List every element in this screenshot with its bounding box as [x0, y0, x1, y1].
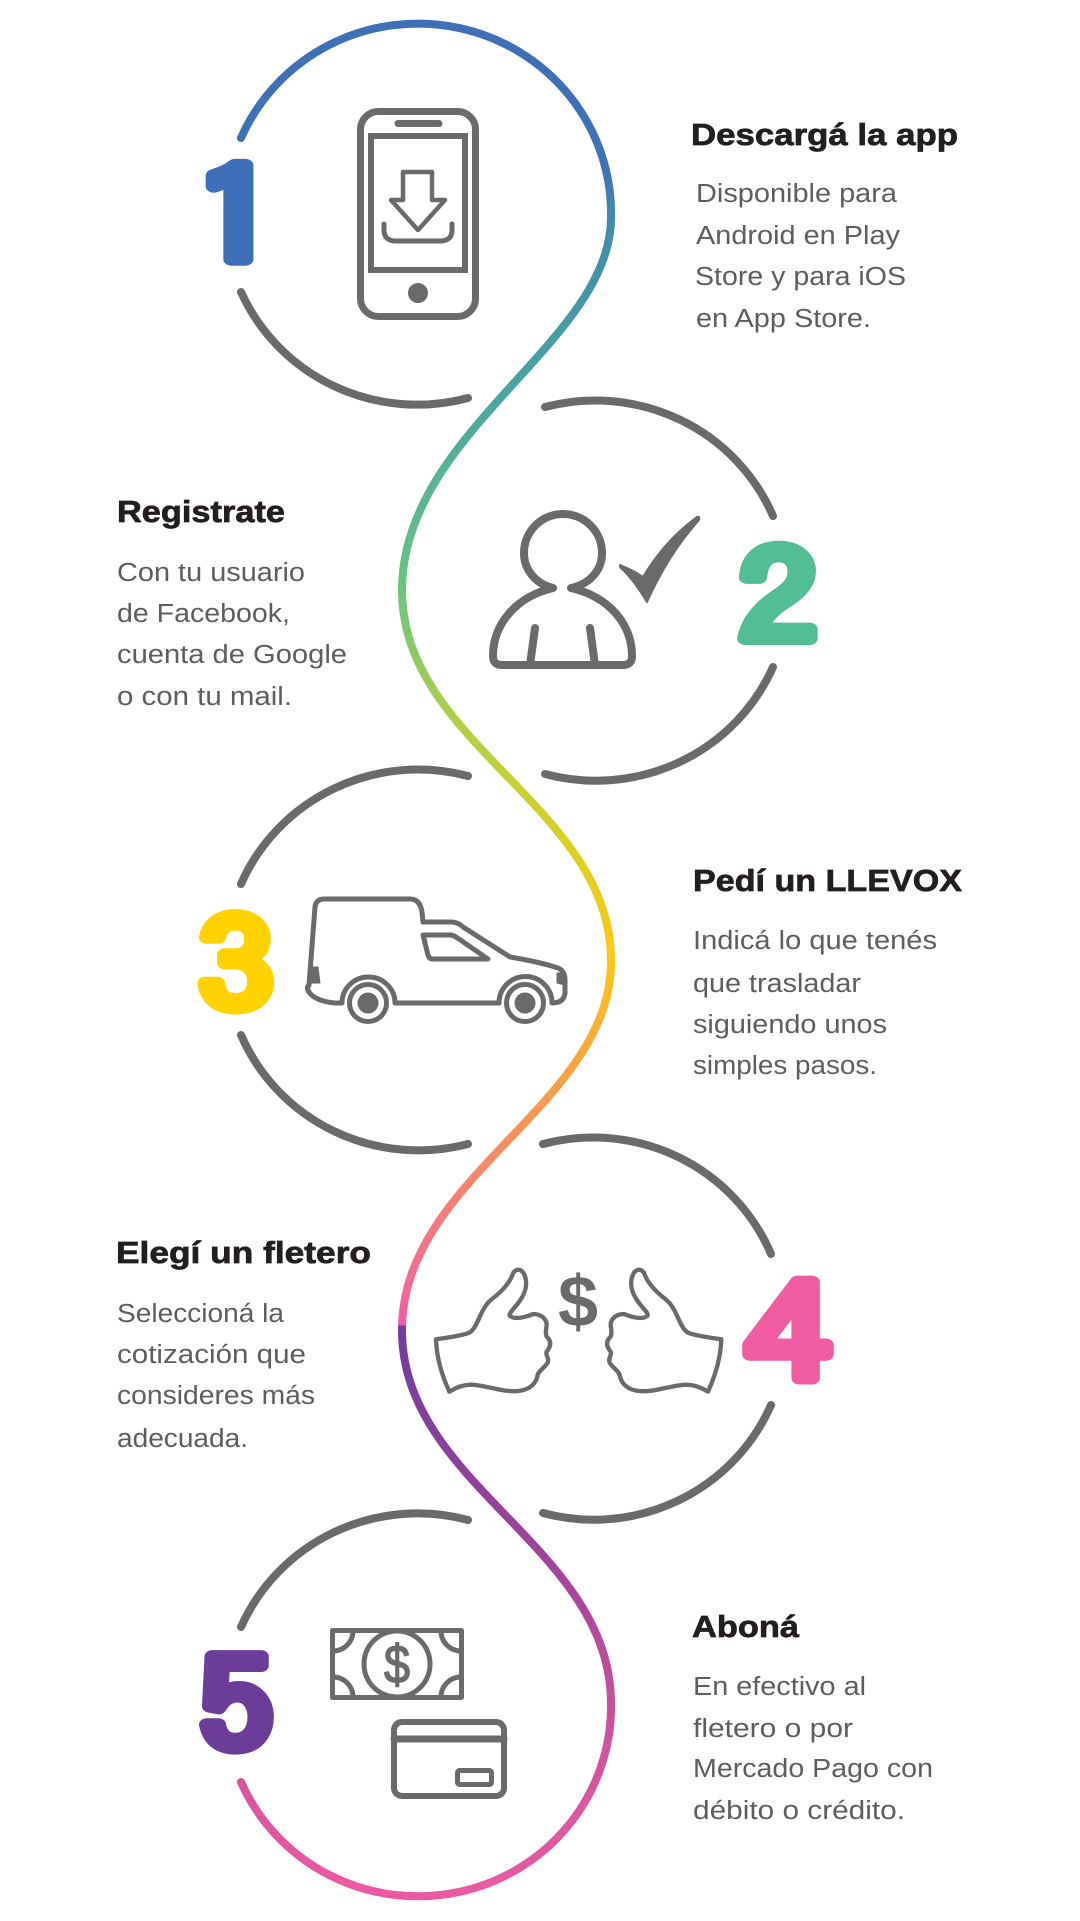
text block 2: Con tu usuario [117, 559, 305, 587]
number 1: 1 [194, 149, 278, 283]
text block 3: siguiendo unos [693, 1011, 887, 1039]
text block 4: cotización que [117, 1341, 306, 1369]
circle arc 5 [241, 1513, 468, 1627]
icon: van [308, 899, 565, 1022]
heading: Elegí un fletero: Elegí un fletero [116, 1236, 371, 1270]
text block 5: débito o crédito. [693, 1797, 905, 1825]
text block 2: o con tu mail. [117, 683, 292, 711]
icon: thumbs up and dollar [436, 1262, 721, 1392]
number 3: 3 [199, 903, 273, 1028]
text block 1: en App Store. [696, 305, 871, 333]
icon: user with check [493, 514, 699, 665]
text block 3: que trasladar [693, 970, 862, 998]
panel: step 5 [199, 1513, 933, 1825]
number 4: 4 [746, 1265, 830, 1402]
gradient connecting line [241, 24, 611, 1896]
text block 1: Store y para iOS [695, 263, 906, 291]
text block 3 [693, 927, 937, 1080]
text block 2: de Facebook, [117, 600, 290, 628]
circle arcs 3 [241, 770, 468, 1150]
text block 4: Seleccioná la [117, 1300, 285, 1328]
icon: banknote [332, 1630, 462, 1698]
text block 4: adecuada. [117, 1425, 248, 1453]
panel: step 1 [194, 112, 958, 405]
text block 5 [693, 1673, 933, 1825]
text block 3: simples pasos. [693, 1052, 877, 1080]
circle arcs 4 [543, 1138, 771, 1520]
text block 5: Mercado Pago con [693, 1755, 933, 1783]
heading: Aboná: Aboná [692, 1610, 800, 1644]
panel: step 2 [117, 400, 817, 781]
circle arc 1 [241, 292, 468, 405]
icon: thumbs up and dollar: $ [558, 1262, 598, 1342]
icon: banknote: $ [384, 1635, 410, 1695]
heading: Pedí un LLEVOX: Pedí un LLEVOX [693, 864, 963, 898]
text block 5: fletero o por [693, 1715, 854, 1743]
panel: step 3 [199, 770, 963, 1150]
icon: credit card [394, 1722, 504, 1796]
number 5: 5 [199, 1641, 273, 1768]
heading: Registrate: Registrate [117, 495, 285, 529]
text block 4: consideres más [117, 1382, 315, 1410]
icon: phone download [360, 112, 476, 316]
number 2: 2 [739, 534, 817, 661]
text block 5: En efectivo al [693, 1673, 866, 1701]
heading: Descargá la app: Descargá la app [691, 118, 958, 152]
text block 1: Disponible para [696, 180, 898, 208]
text block 2 [117, 559, 347, 711]
text block 3: Indicá lo que tenés [693, 927, 937, 955]
panel: step 4 [116, 1138, 830, 1520]
text block 4 [117, 1300, 315, 1453]
text block 1 [695, 180, 906, 333]
text block 2: cuenta de Google [117, 641, 347, 669]
text block 1: Android en Play [696, 222, 900, 250]
circle arcs 2 [545, 400, 773, 781]
